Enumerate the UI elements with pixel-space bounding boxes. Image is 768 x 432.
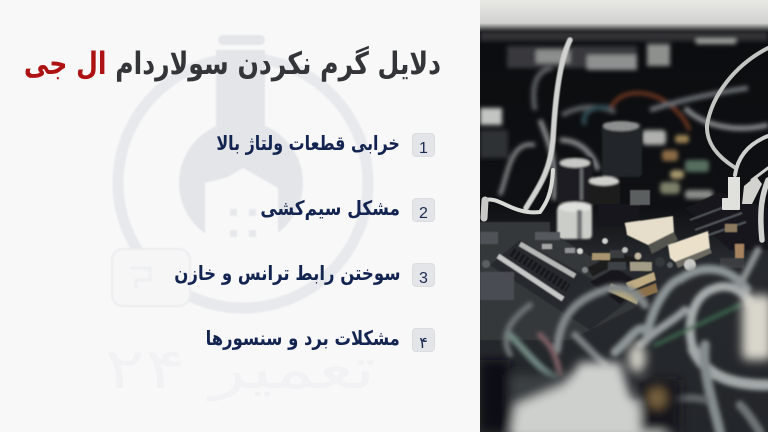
item 3 number: [412, 263, 435, 287]
list item 1: [216, 131, 435, 157]
photo: circuit board with wires: [480, 0, 768, 432]
connectors: [722, 176, 762, 210]
watermark logo: [112, 35, 374, 314]
item 4 text: مشکلات برد و سنسورها: [206, 326, 400, 350]
sharp wires upper: [484, 40, 768, 240]
item 2 text: مشکل سیم‌کشی: [260, 196, 400, 220]
blurred upper background parts: [480, 31, 768, 200]
title: دلایل گرم نکردن سولاردام ال جی: [24, 46, 441, 82]
item 1 text: خرابی قطعات ولتاژ بالا: [216, 131, 400, 155]
item 2 number: [412, 198, 435, 222]
item 3 number: 3: [419, 270, 428, 287]
sharp board components: [480, 190, 768, 340]
list item 2: [260, 196, 435, 222]
capacitors: [557, 121, 642, 239]
watermark text: تعمیر ۲۴: [104, 337, 375, 402]
item 2 number: 2: [419, 205, 428, 222]
item 1 number: [412, 133, 435, 157]
item 4 number: [412, 328, 435, 352]
list item 3: [174, 261, 435, 287]
blurred foreground wires and blocks: [506, 250, 768, 432]
item 4 number: ۴: [419, 335, 428, 352]
item 1 number: 1: [419, 140, 428, 157]
item 3 text: سوختن رابط ترانس و خازن: [174, 261, 400, 285]
list item 4: [206, 326, 435, 352]
